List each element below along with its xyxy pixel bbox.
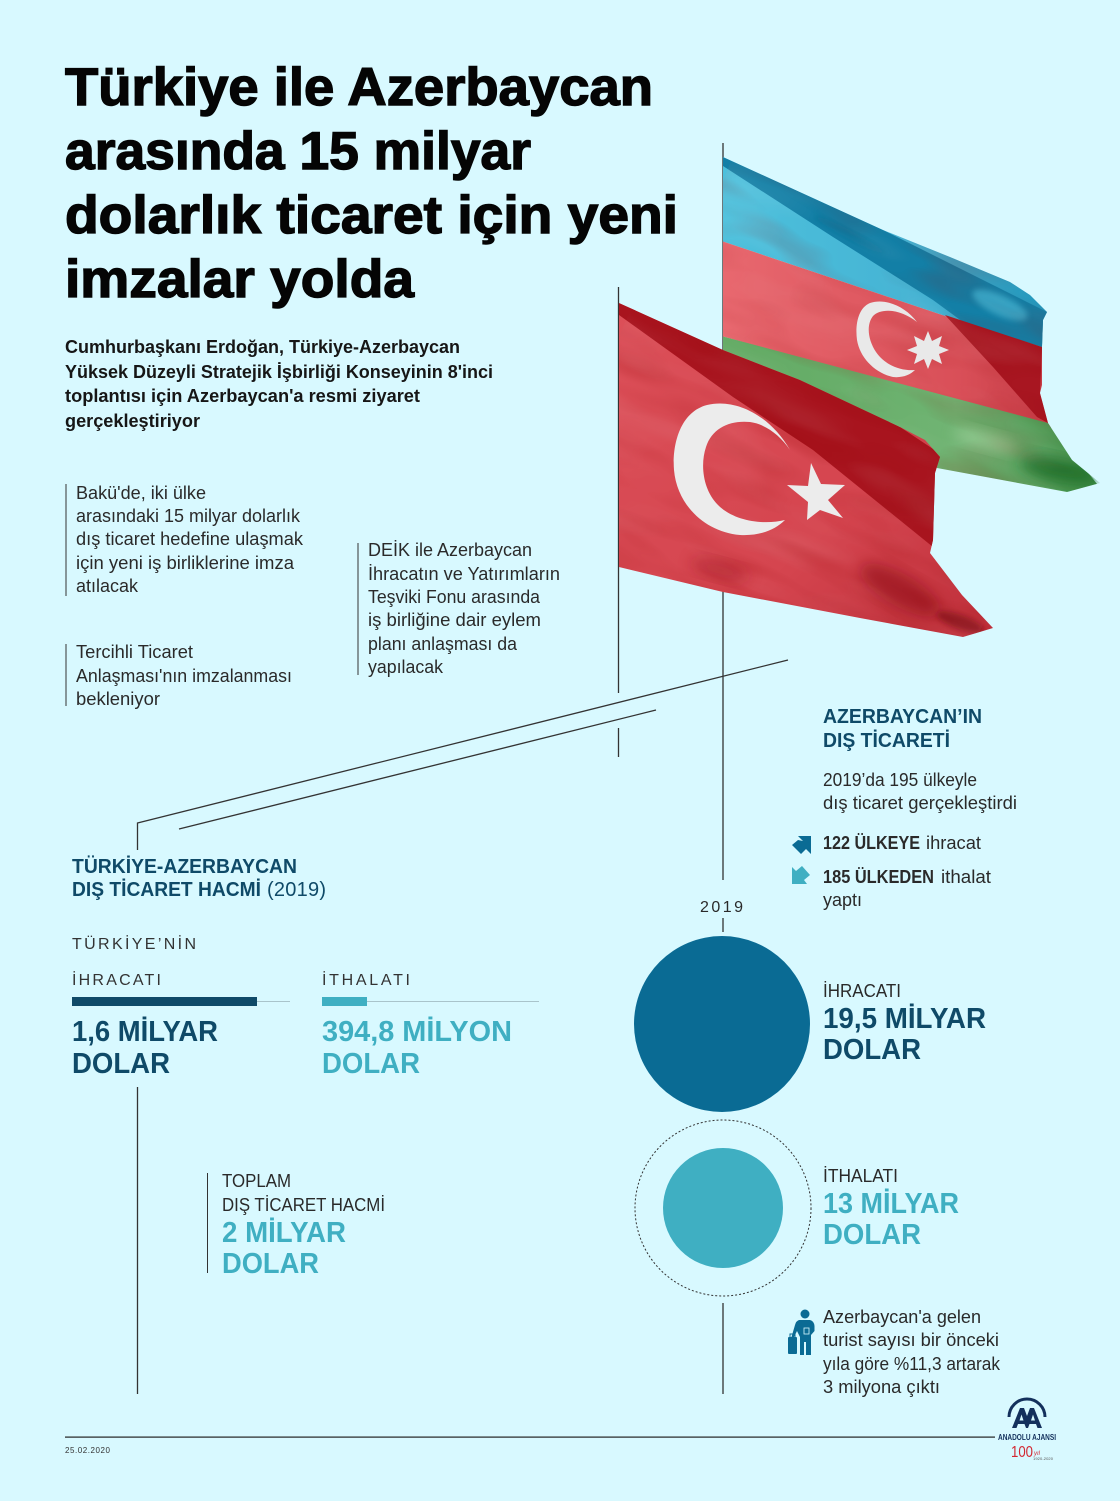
- text: export countries: ihracat: [926, 833, 981, 853]
- stat: Turkey's exports: 1,6 MİLYAR: [72, 1016, 218, 1048]
- heading: Turkey-Azerbaijan trade volume: (2019): [267, 879, 326, 901]
- stat: Azerbaijan exports: İHRACATI: [823, 981, 901, 1001]
- text block: 15 billion target: dış ticaret hedefine ulaşmak: [76, 529, 304, 549]
- stat: Azerbaijan imports: DOLAR: [823, 1219, 921, 1251]
- icon: tourist with suitcase: [788, 1310, 814, 1355]
- text block: 15 billion target: için yeni iş birliklerine imza: [76, 553, 295, 573]
- text: 195 countries: [823, 770, 1017, 813]
- flag poles and connector lines: [138, 143, 788, 1394]
- text: tourist numbers: Azerbaycan'a gelen: [823, 1307, 981, 1327]
- text block: DEIK action plan: planı anlaşması da: [368, 634, 518, 654]
- text block: 15 billion target: arasındaki 15 milyar dolarlık: [76, 506, 301, 526]
- text: import countries: ithalat: [941, 867, 991, 887]
- text: 195 countries: 2019’da 195 ülkeyle: [823, 770, 977, 790]
- flag: Turkey: [619, 303, 993, 637]
- subtitle: [65, 337, 493, 431]
- title: [65, 58, 678, 309]
- text: import countries: [823, 867, 991, 910]
- stat: Turkey's exports: DOLAR: [72, 1048, 170, 1080]
- stat: total trade volume: TOPLAM: [222, 1171, 291, 1191]
- title: Türkiye ile Azerbaycan: [65, 58, 653, 117]
- heading: Turkey-Azerbaijan trade volume: TÜRKİYE-AZERBAYCAN: [72, 855, 297, 878]
- logo: Anadolu Ajansi: [998, 1399, 1056, 1461]
- icon: import arrow: [792, 866, 810, 884]
- text block: preferential trade agreement: [66, 642, 292, 709]
- stat: total trade volume: 2 MİLYAR: [222, 1217, 346, 1249]
- stat: total trade volume: DIŞ TİCARET HACMİ: [222, 1195, 385, 1215]
- text block: 15 billion target: Bakü'de, iki ülke: [76, 483, 206, 503]
- stat: Azerbaijan exports: 19,5 MİLYAR: [823, 1003, 986, 1035]
- text block: 15 billion target: [66, 483, 304, 596]
- heading: Azerbaijan foreign trade: AZERBAYCAN’IN: [823, 706, 982, 728]
- title: arasında 15 milyar: [65, 122, 531, 181]
- heading: Azerbaijan foreign trade: [823, 706, 982, 752]
- stat: total trade volume: [207, 1171, 385, 1280]
- footer rule: [65, 1436, 995, 1438]
- stat: Azerbaijan imports: 13 MİLYAR: [823, 1188, 959, 1220]
- text: tourist numbers: yıla göre %11,3 artarak: [823, 1354, 1001, 1374]
- subtitle: toplantısı için Azerbaycan'a resmi ziyaret: [65, 386, 420, 406]
- circle: Azerbaijan exports: [634, 936, 810, 1112]
- flag: Azerbaijan: [723, 157, 1100, 492]
- logo: Anadolu Ajansi: 100: [1011, 1444, 1033, 1461]
- heading: Azerbaijan foreign trade: DIŞ TİCARETİ: [823, 729, 950, 752]
- text block: DEIK action plan: Teşviki Fonu arasında: [368, 587, 541, 607]
- text: tourist numbers: turist sayısı bir önceki: [823, 1330, 999, 1350]
- text: export countries: [823, 833, 981, 853]
- text block: DEIK action plan: DEİK ile Azerbaycan: [368, 540, 532, 560]
- text block: DEIK action plan: iş birliğine dair eylem: [368, 610, 541, 630]
- date: 25.02.2020: [65, 1446, 111, 1455]
- title: imzalar yolda: [65, 250, 415, 309]
- logo: Anadolu Ajansi: yıl: [1033, 1451, 1041, 1457]
- text block: DEIK action plan: İhracatın ve Yatırımların: [368, 564, 560, 584]
- text: import countries: yaptı: [823, 890, 862, 910]
- text block: preferential trade agreement: Tercihli Ticaret: [76, 642, 193, 662]
- stat: Turkey's imports: İTHALATI: [322, 970, 410, 989]
- stat: Azerbaijan imports: [823, 1166, 959, 1251]
- text: import countries: 185 ÜLKEDEN: [823, 867, 934, 887]
- text: export countries: 122 ÜLKEYE: [823, 833, 920, 853]
- logo: Anadolu Ajansi: 1920-2020: [1033, 1456, 1054, 1461]
- label: 2019: 2019: [700, 899, 743, 916]
- text block: DEIK action plan: yapılacak: [368, 657, 444, 677]
- text block: 15 billion target: atılacak: [76, 576, 139, 596]
- text block: DEIK action plan: [358, 540, 560, 677]
- text: 195 countries: dış ticaret gerçekleştirdi: [823, 793, 1017, 813]
- stat: Azerbaijan exports: [823, 981, 986, 1066]
- stat: Turkey's imports: 394,8 MİLYON: [322, 1016, 512, 1048]
- icon: export arrow: [792, 836, 811, 854]
- heading: Turkey-Azerbaijan trade volume: [72, 855, 326, 901]
- stat: Turkey's imports: [322, 970, 539, 1080]
- text: tourist numbers: [823, 1307, 1001, 1397]
- subtitle: Cumhurbaşkanı Erdoğan, Türkiye-Azerbaycan: [65, 337, 460, 357]
- text: tourist numbers: 3 milyona çıktı: [823, 1377, 940, 1397]
- text block: preferential trade agreement: bekleniyor: [76, 689, 160, 709]
- stat: total trade volume: DOLAR: [222, 1248, 319, 1280]
- subtitle: gerçekleştiriyor: [65, 411, 200, 431]
- circle: Azerbaijan imports: [635, 1120, 811, 1296]
- stat: Turkey's exports: İHRACATI: [72, 970, 161, 989]
- text block: preferential trade agreement: Anlaşması'nın imzalanması: [76, 666, 292, 686]
- stat: Azerbaijan exports: DOLAR: [823, 1034, 921, 1066]
- stat: Turkey's exports: [72, 970, 290, 1080]
- stat: Turkey's imports: DOLAR: [322, 1048, 420, 1080]
- label: Turkey's: TÜRKİYE’NİN: [72, 934, 196, 953]
- title: dolarlık ticaret için yeni: [65, 186, 678, 245]
- logo: Anadolu Ajansi: ANADOLU AJANSI: [998, 1433, 1056, 1442]
- heading: Turkey-Azerbaijan trade volume: DIŞ TİCARET HACMİ: [72, 878, 261, 901]
- subtitle: Yüksek Düzeyli Stratejik İşbirliği Konseyinin 8'inci: [65, 362, 493, 382]
- stat: Azerbaijan imports: İTHALATI: [823, 1166, 898, 1186]
